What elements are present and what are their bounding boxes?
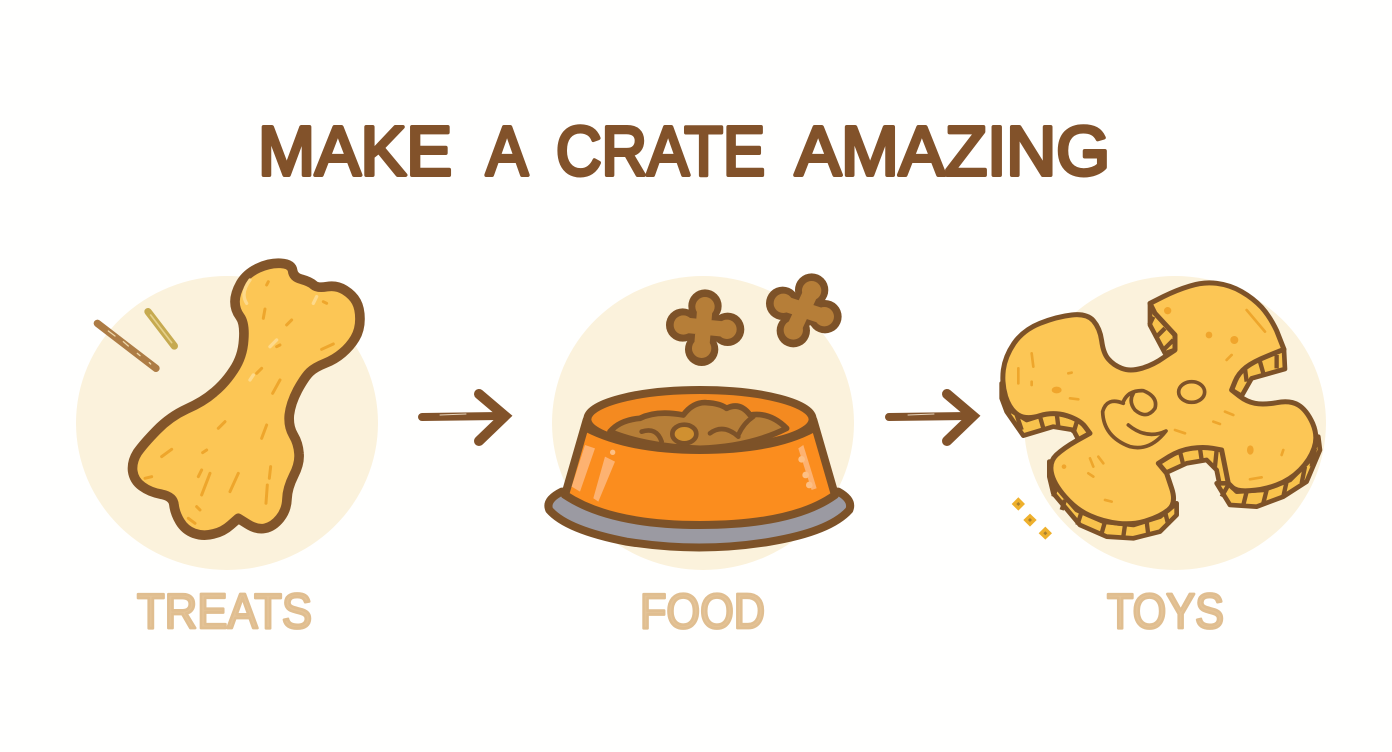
treats background circle (76, 276, 378, 570)
food in bowl (610, 403, 787, 448)
bowl body (565, 420, 835, 525)
icon: kibble right (766, 273, 842, 347)
toy side bands (1002, 303, 1320, 538)
panel: toys (1002, 276, 1326, 639)
label: food: FOOD (640, 585, 765, 639)
label: toys: TOYS (1107, 585, 1224, 639)
bowl base (548, 492, 850, 547)
toys background circle (1024, 276, 1326, 570)
panel: treats (76, 263, 378, 639)
arrow: food to toys (889, 394, 973, 441)
icon: toy (1002, 283, 1320, 538)
toy top surface (1003, 283, 1316, 524)
food background circle (552, 276, 854, 570)
toy side ticks (1005, 317, 1315, 537)
toy face (1103, 382, 1205, 448)
title: AMAZING (795, 112, 1110, 190)
bowl highlights (572, 445, 615, 502)
bowl front lip (587, 428, 813, 450)
icon: bone (133, 263, 360, 535)
panel: food (548, 273, 854, 639)
title (258, 112, 1110, 190)
arrow: treats to food (422, 394, 505, 441)
icon: kibble left (666, 289, 744, 366)
label: treats: TREATS (137, 585, 312, 639)
title: A (486, 112, 528, 190)
icon: crumbs (1012, 497, 1052, 540)
icon: chew sticks (97, 312, 174, 368)
title: MAKE (258, 112, 452, 190)
icon: food bowl (548, 390, 850, 547)
title: CRATE (556, 112, 765, 190)
toy specks (1018, 310, 1283, 502)
bowl rim (587, 390, 813, 449)
